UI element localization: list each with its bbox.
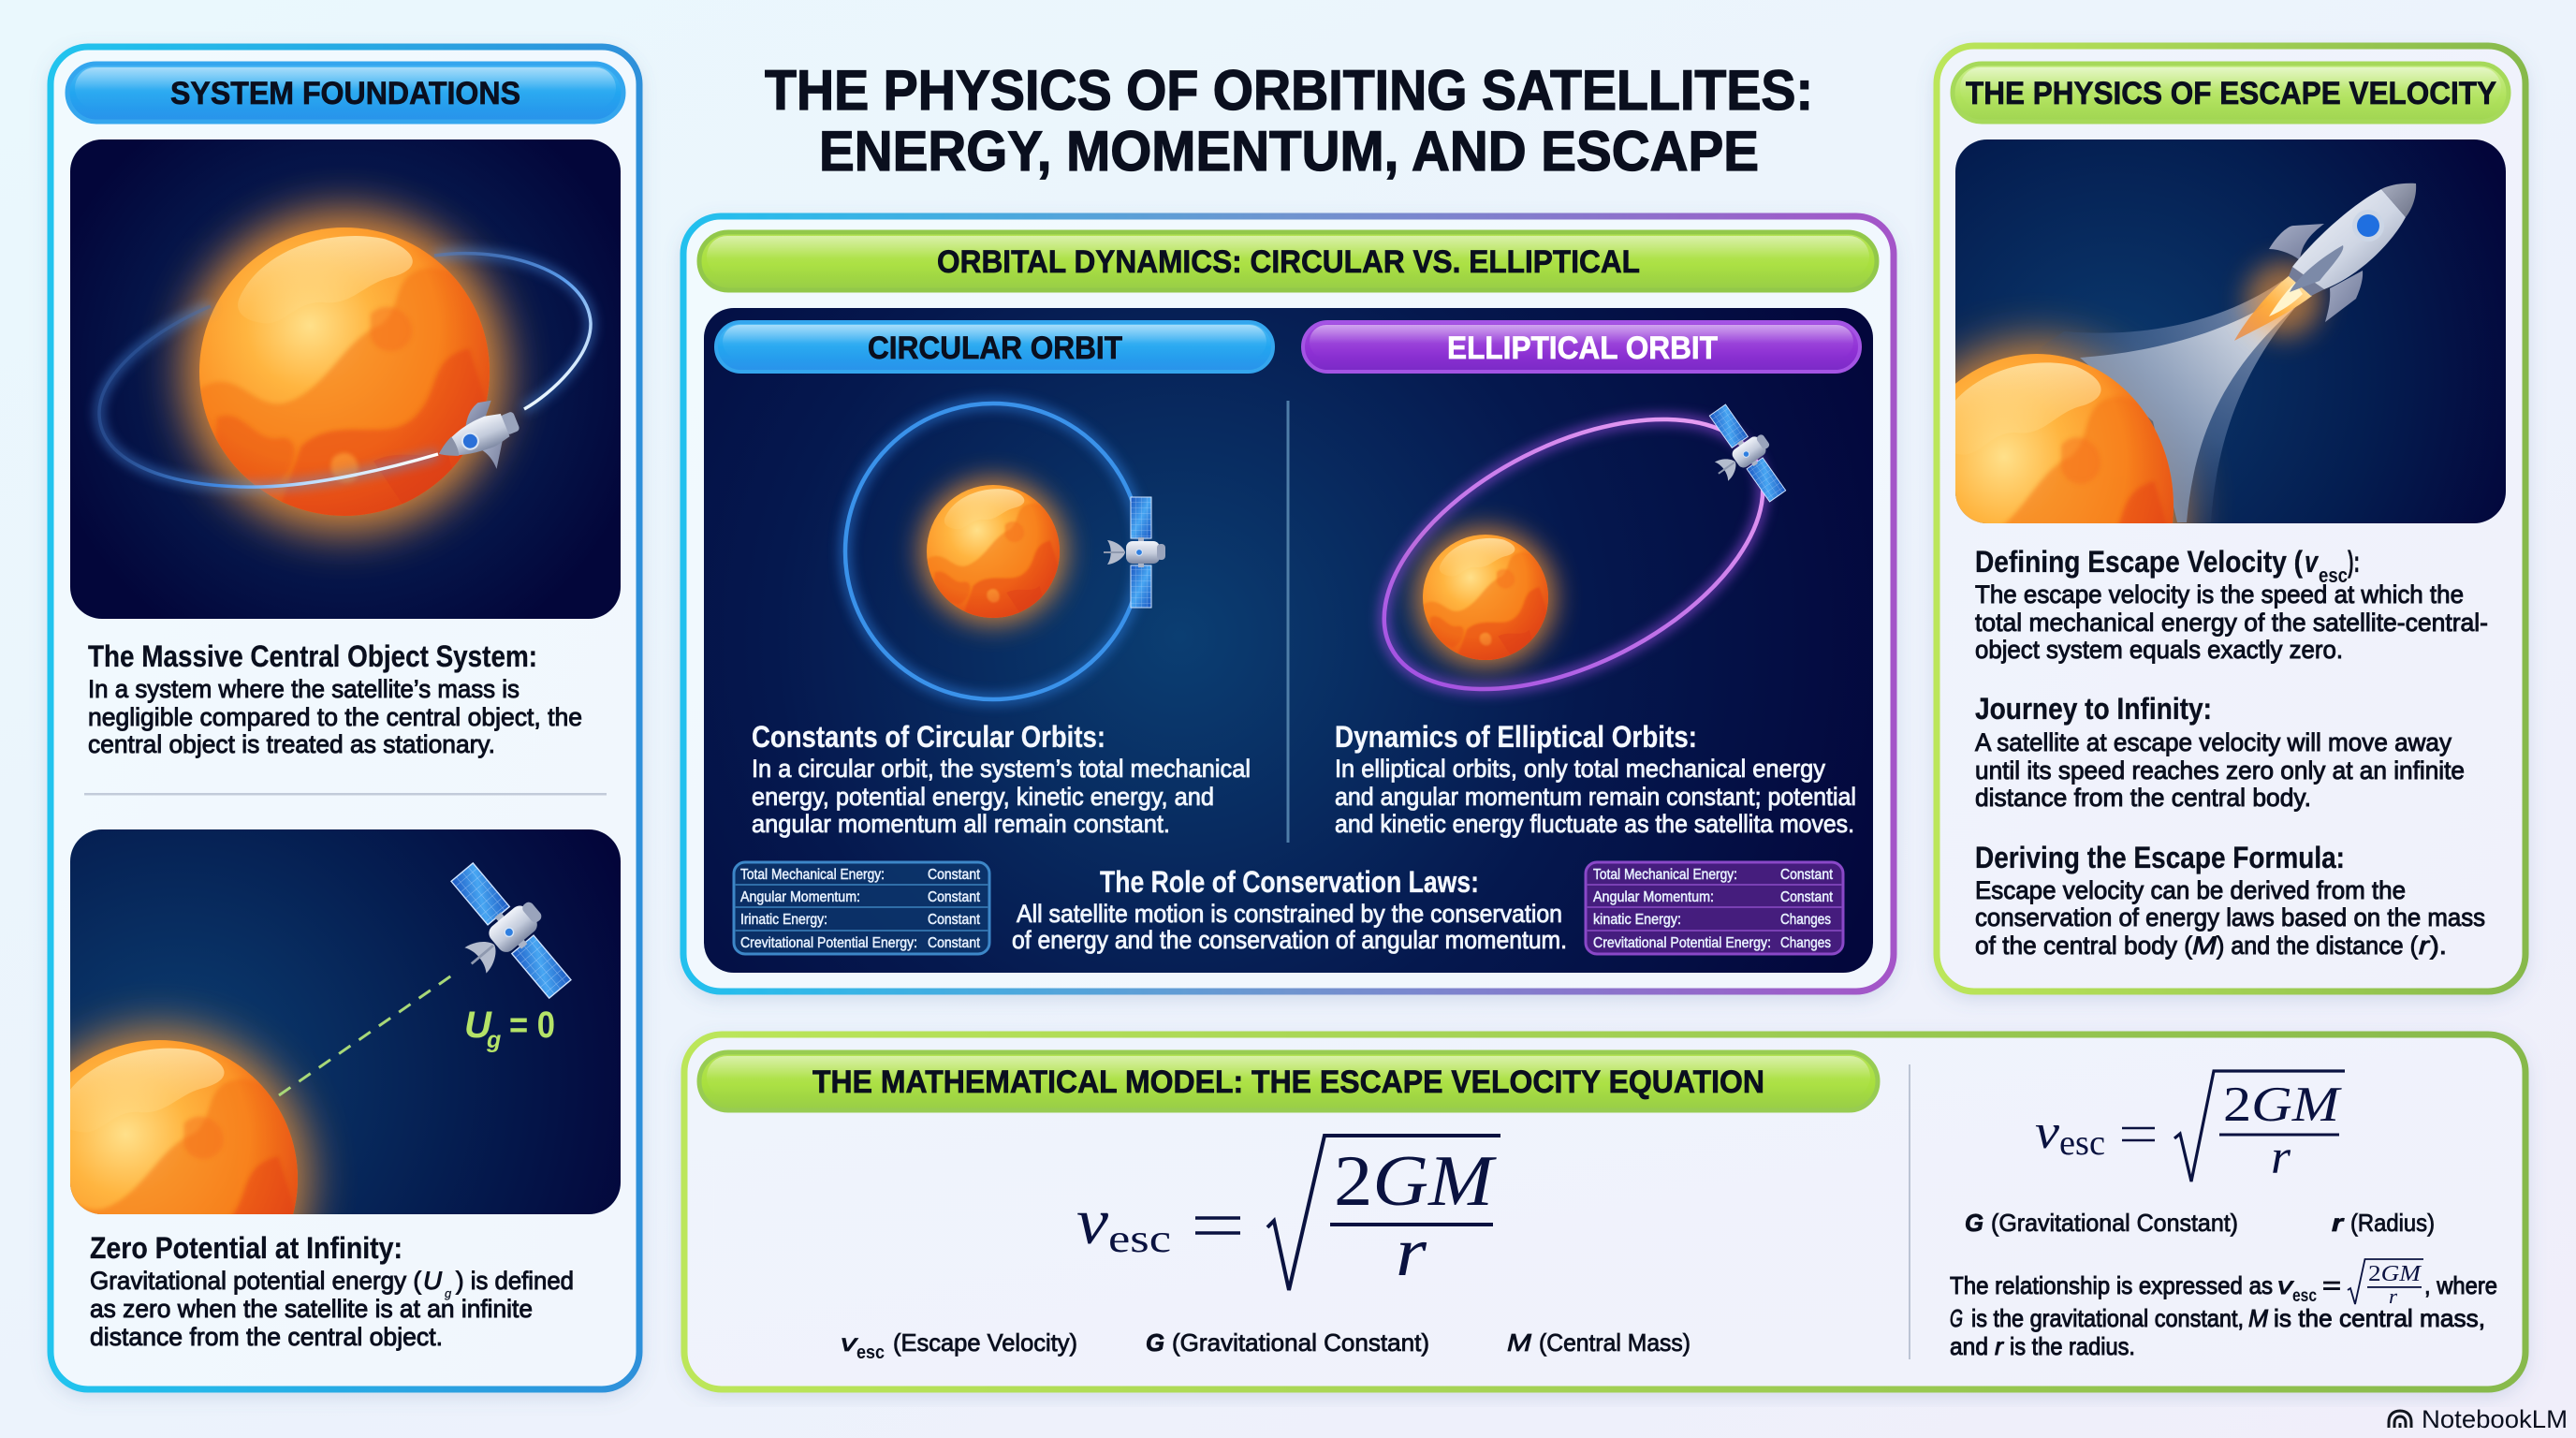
text block: massive central object: In a system where the satellite’s mass is bbox=[88, 675, 520, 703]
text block: relationship: r bbox=[2389, 1284, 2397, 1308]
equation: escape velocity large: r bbox=[1396, 1214, 1427, 1291]
title bbox=[765, 59, 1813, 183]
text block: relationship: M bbox=[2248, 1304, 2268, 1332]
icon: satellite on circular orbit bbox=[1104, 497, 1165, 608]
icon: small rocket bbox=[439, 401, 520, 469]
heading pill: mathematical model bbox=[699, 1052, 1878, 1110]
text block: journey to infinity bbox=[1975, 692, 2465, 812]
heading pill: orbital dynamics bbox=[699, 232, 1877, 290]
text block: relationship: , where bbox=[2424, 1271, 2497, 1299]
legend: constants: (Radius) bbox=[2350, 1209, 2435, 1237]
text block: massive central object: central object is treated as stationary. bbox=[88, 730, 495, 758]
equation: escape velocity small: 2GM bbox=[2223, 1078, 2342, 1132]
text block: constants of circular orbits: energy, potential energy, kinetic energy, and bbox=[752, 783, 1214, 811]
legend: constants: G bbox=[1965, 1209, 1983, 1237]
heading pill: circular orbit bbox=[716, 322, 1273, 372]
text block: the role of conservation laws: All satellite motion is constrained by the conservation bbox=[1017, 900, 1562, 928]
table: circular orbit values bbox=[734, 862, 989, 954]
label: Ug = 0: U bbox=[464, 1005, 492, 1046]
table: elliptical orbit values: Constant bbox=[1780, 889, 1833, 905]
text block: journey to infinity: Journey to Infinity: bbox=[1975, 692, 2212, 726]
text block: deriving the escape formula: of the central body ( bbox=[1975, 932, 2192, 960]
table: circular orbit values: Constant bbox=[928, 867, 980, 883]
equation: escape velocity large: 2GM bbox=[1334, 1140, 1497, 1221]
text block: dynamics of elliptical orbits: In elliptical orbits, only total mechanical energy bbox=[1335, 755, 1825, 783]
text block: dynamics of elliptical orbits: and angular momentum remain constant; potential bbox=[1335, 783, 1856, 811]
legend: variables: esc bbox=[856, 1343, 885, 1363]
legend: variables: G bbox=[1146, 1328, 1164, 1357]
table: elliptical orbit values: Constant bbox=[1780, 867, 1833, 883]
illustration: zero potential at infinity bbox=[70, 829, 621, 1214]
text block: relationship: is the radius. bbox=[2010, 1332, 2135, 1360]
text block: relationship: G bbox=[1950, 1304, 1963, 1332]
text block: journey to infinity: distance from the central body. bbox=[1975, 784, 2311, 812]
text block: deriving the escape formula: ). bbox=[2430, 932, 2447, 960]
text block: journey to infinity: A satellite at escape velocity will move away bbox=[1975, 728, 2452, 756]
text block: zero potential: g bbox=[445, 1286, 452, 1300]
text block: relationship: = bbox=[2322, 1271, 2341, 1299]
title: ENERGY, MOMENTUM, AND ESCAPE bbox=[819, 120, 1759, 183]
text block: the role of conservation laws: The Role of Conservation Laws: bbox=[1100, 865, 1479, 899]
equation: escape velocity small: r bbox=[2271, 1131, 2291, 1184]
icon: satellite on elliptical orbit bbox=[1689, 397, 1796, 517]
text block: defining escape velocity: total mechanical energy of the satellite-central- bbox=[1975, 609, 2488, 637]
diagram: elliptical orbit bbox=[1341, 363, 1806, 745]
text block: dynamics of elliptical orbits: Dynamics of Elliptical Orbits: bbox=[1335, 720, 1697, 754]
heading pill: escape velocity bbox=[1953, 64, 2509, 122]
title: THE PHYSICS OF ORBITING SATELLITES: bbox=[765, 59, 1813, 122]
label: Ug = 0 bbox=[466, 1011, 554, 1052]
equation: escape velocity small: esc bbox=[2059, 1123, 2105, 1163]
table: elliptical orbit values: Crevitational Potential Energy: bbox=[1593, 935, 1771, 951]
text block: relationship: is the gravitational constant, bbox=[1971, 1304, 2244, 1332]
table: circular orbit values: Total Mechanical Energy: bbox=[740, 867, 885, 883]
text block: constants of circular orbits: Constants of Circular Orbits: bbox=[752, 720, 1105, 754]
table: circular orbit values: Constant bbox=[928, 912, 980, 928]
table: circular orbit values: Crevitational Potential Energy: bbox=[740, 935, 917, 951]
heading pill: orbital dynamics: ORBITAL DYNAMICS: CIRCULAR VS. ELLIPTICAL bbox=[937, 244, 1640, 280]
illustration: rocket escaping planet bbox=[1955, 139, 2506, 523]
text block: massive central object bbox=[88, 639, 582, 758]
text block: zero potential: U bbox=[423, 1267, 443, 1295]
dark comparison panel bbox=[704, 308, 1873, 973]
label: Ug = 0: g bbox=[486, 1027, 501, 1053]
diagram: circular orbit bbox=[845, 404, 1165, 699]
heading pill: elliptical orbit: ELLIPTICAL ORBIT bbox=[1447, 330, 1718, 366]
panel: system foundations bbox=[7, 47, 639, 1389]
text block: deriving the escape formula bbox=[1975, 841, 2485, 960]
text block: deriving the escape formula: Escape velocity can be derived from the bbox=[1975, 876, 2406, 904]
table: elliptical orbit values: Total Mechanical Energy: bbox=[1593, 867, 1737, 883]
illustration: central planet with orbit and rocket bbox=[70, 139, 621, 619]
text block: the role of conservation laws bbox=[1012, 865, 1567, 954]
table: circular orbit values: Constant bbox=[928, 889, 980, 905]
text block: relationship bbox=[1950, 1259, 2497, 1360]
heading pill: circular orbit: CIRCULAR ORBIT bbox=[868, 330, 1122, 366]
equation: escape velocity small bbox=[2035, 1071, 2345, 1184]
heading pill: system foundations bbox=[67, 64, 623, 122]
icon: satellite bbox=[450, 861, 572, 1000]
legend: variables: (Gravitational Constant) bbox=[1172, 1328, 1429, 1357]
equation: escape velocity large bbox=[1076, 1136, 1500, 1291]
legend: constants: r bbox=[2332, 1209, 2345, 1237]
logo: NotebookLM: NotebookLM bbox=[2422, 1405, 2568, 1433]
panel: mathematical model bbox=[684, 1034, 2525, 1389]
text block: defining escape velocity: ): bbox=[2348, 545, 2360, 579]
text block: defining escape velocity: The escape velocity is the speed at which the bbox=[1975, 580, 2464, 609]
text block: zero potential: as zero when the satellite is at an infinite bbox=[90, 1295, 533, 1323]
heading pill: mathematical model: THE MATHEMATICAL MODEL: THE ESCAPE VELOCITY EQUATION bbox=[812, 1064, 1764, 1100]
legend: constants: (Gravitational Constant) bbox=[1991, 1209, 2238, 1237]
table: elliptical orbit values: Changes bbox=[1780, 935, 1831, 951]
table: elliptical orbit values: Changes bbox=[1780, 912, 1831, 928]
legend: variables: (Central Mass) bbox=[1539, 1328, 1690, 1357]
table: circular orbit values: Irinatic Energy: bbox=[740, 912, 827, 928]
text block: relationship: 2GM bbox=[2368, 1262, 2422, 1286]
text block: zero potential: ) is defined bbox=[456, 1267, 574, 1295]
panel: orbital dynamics bbox=[683, 216, 1894, 991]
heading pill: escape velocity: THE PHYSICS OF ESCAPE VELOCITY bbox=[1966, 76, 2496, 111]
table: circular orbit values: Angular Momentum: bbox=[740, 889, 860, 905]
text block: relationship: is the central mass, bbox=[2274, 1304, 2485, 1332]
text block: zero potential bbox=[90, 1231, 574, 1351]
table: circular orbit values: Constant bbox=[928, 935, 980, 951]
text block: relationship: The relationship is expressed as bbox=[1950, 1271, 2273, 1299]
table: elliptical orbit values bbox=[1586, 862, 1843, 954]
equation: escape velocity small: v bbox=[2035, 1106, 2060, 1159]
icon: rocket bbox=[2234, 183, 2416, 341]
text block: constants of circular orbits: In a circular orbit, the system’s total mechanical bbox=[752, 755, 1251, 783]
text block: deriving the escape formula: conservation of energy laws based on the mass bbox=[1975, 903, 2485, 932]
text block: dynamics of elliptical orbits bbox=[1335, 720, 1856, 838]
heading pill: system foundations: SYSTEM FOUNDATIONS bbox=[170, 76, 520, 111]
text block: defining escape velocity: object system equals exactly zero. bbox=[1975, 636, 2343, 664]
text block: zero potential: Gravitational potential energy ( bbox=[90, 1267, 421, 1295]
text block: constants of circular orbits: angular momentum all remain constant. bbox=[752, 810, 1170, 838]
table: elliptical orbit values: kinatic Energy: bbox=[1593, 912, 1681, 928]
text block: zero potential: distance from the central object. bbox=[90, 1323, 443, 1351]
text block: deriving the escape formula: Deriving the Escape Formula: bbox=[1975, 841, 2345, 874]
text block: relationship: and bbox=[1950, 1332, 1988, 1360]
text block: the role of conservation laws: of energy and the conservation of angular momentum. bbox=[1012, 926, 1567, 954]
heading pill: elliptical orbit bbox=[1303, 322, 1860, 372]
text block: defining escape velocity bbox=[1975, 545, 2488, 664]
label: Ug = 0: = 0 bbox=[509, 1005, 555, 1046]
equation: escape velocity large: v bbox=[1076, 1186, 1109, 1258]
text block: defining escape velocity: Defining Escape Velocity ( bbox=[1975, 545, 2303, 579]
legend: variables bbox=[841, 1328, 1690, 1363]
text block: zero potential: Zero Potential at Infinity: bbox=[90, 1231, 402, 1265]
text block: massive central object: The Massive Central Object System: bbox=[88, 639, 537, 673]
equation: escape velocity large: esc bbox=[1108, 1218, 1171, 1261]
legend: variables: v bbox=[841, 1328, 859, 1357]
table: elliptical orbit values: Angular Momentum: bbox=[1593, 889, 1714, 905]
text block: deriving the escape formula: r bbox=[2419, 932, 2430, 960]
text block: defining escape velocity: esc bbox=[2319, 564, 2348, 587]
text block: relationship: v bbox=[2277, 1271, 2294, 1299]
text block: constants of circular orbits bbox=[752, 720, 1251, 838]
legend: constants bbox=[1965, 1209, 2435, 1237]
legend: variables: (Escape Velocity) bbox=[893, 1328, 1077, 1357]
legend: variables: M bbox=[1507, 1328, 1531, 1357]
text block: relationship: esc bbox=[2292, 1286, 2317, 1306]
text block: deriving the escape formula: M bbox=[2192, 932, 2217, 960]
text block: journey to infinity: until its speed reaches zero only at an infinite bbox=[1975, 756, 2465, 785]
panel: physics of escape velocity bbox=[1886, 46, 2525, 991]
text block: defining escape velocity: v bbox=[2305, 545, 2320, 579]
text block: relationship: r bbox=[1995, 1332, 2004, 1360]
text block: deriving the escape formula: ) and the distance ( bbox=[2217, 932, 2418, 960]
text block: dynamics of elliptical orbits: and kinetic energy fluctuate as the satellita moves. bbox=[1335, 810, 1854, 838]
text block: massive central object: negligible compared to the central object, the bbox=[88, 703, 582, 731]
